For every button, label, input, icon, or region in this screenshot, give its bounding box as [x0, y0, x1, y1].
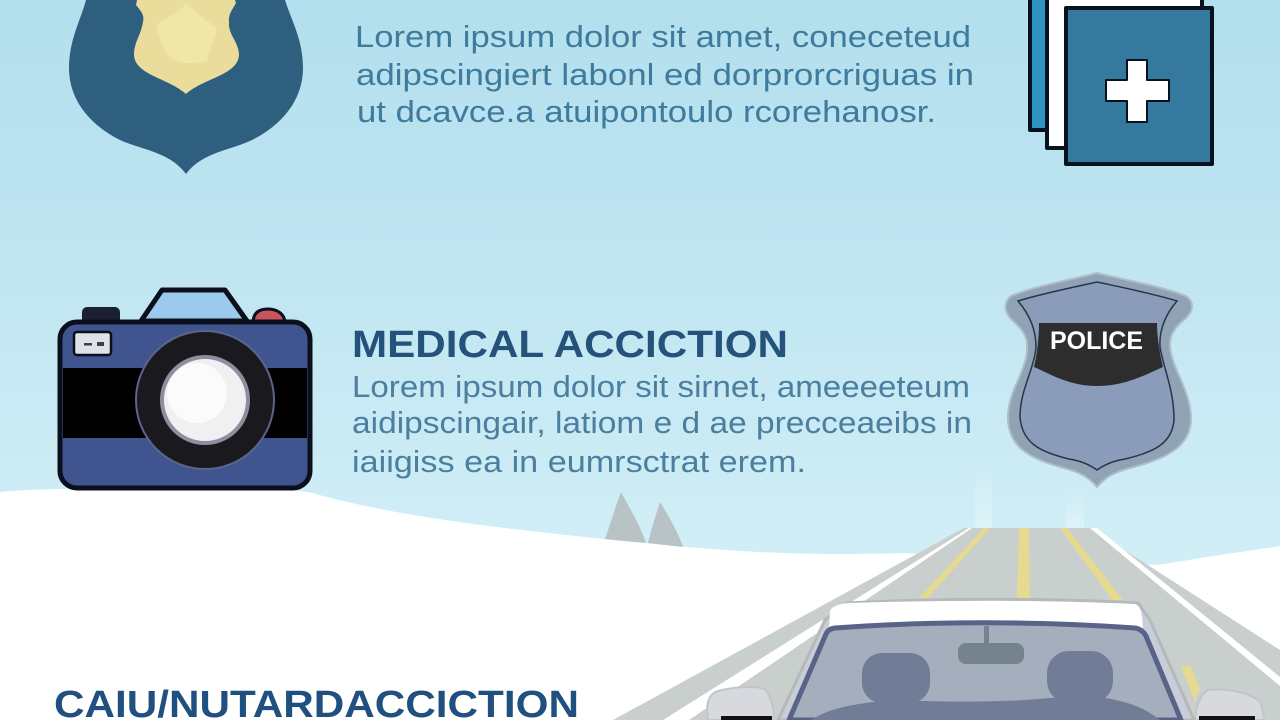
camera flash window [74, 332, 111, 355]
car occupants and seats [811, 651, 1160, 720]
text block: second paragraph: iaiigiss ea in eumrsctrat erem. [352, 444, 806, 479]
car side mirrors [707, 687, 1264, 720]
car rear-view mirror [958, 626, 1024, 664]
text block: first paragraph [355, 19, 974, 129]
text block: first paragraph: ut dcavce.a atuipontoulo rcorehanosr. [357, 94, 936, 129]
icon: camera [60, 290, 310, 488]
camera black stripe [63, 368, 307, 438]
camera body [60, 322, 310, 488]
badge label: POLICE [1050, 327, 1143, 355]
text block: second paragraph [352, 369, 972, 479]
text block: first paragraph: adipscingiert labonl ed dorprorcriguas in [356, 57, 974, 92]
badge black band [1034, 323, 1163, 386]
camera viewfinder [141, 290, 247, 321]
car body [778, 599, 1194, 720]
road [613, 528, 1280, 720]
car windshield [789, 623, 1181, 720]
car [707, 599, 1264, 720]
text block: second paragraph: aidipscingair, latiom e d ae precceaeibs in [352, 405, 972, 440]
car roof [829, 601, 1143, 629]
light beams above the road [975, 460, 1084, 528]
icon: shield with gold badge [69, 0, 303, 174]
text block: medical heading: MEDICAL ACCICTION [352, 324, 788, 366]
hill: snowy ground [0, 489, 1280, 720]
camera shutter and red button [82, 307, 285, 325]
trees on the horizon [605, 492, 683, 547]
text block: second paragraph: Lorem ipsum dolor sit sirnet, ameeeeteum [352, 369, 970, 404]
camera lens [136, 331, 274, 469]
icon: medical folders with cross [1030, 0, 1212, 164]
text block: first paragraph: Lorem ipsum dolor sit amet, coneceteud [355, 19, 971, 54]
icon: police badge [1006, 273, 1192, 487]
